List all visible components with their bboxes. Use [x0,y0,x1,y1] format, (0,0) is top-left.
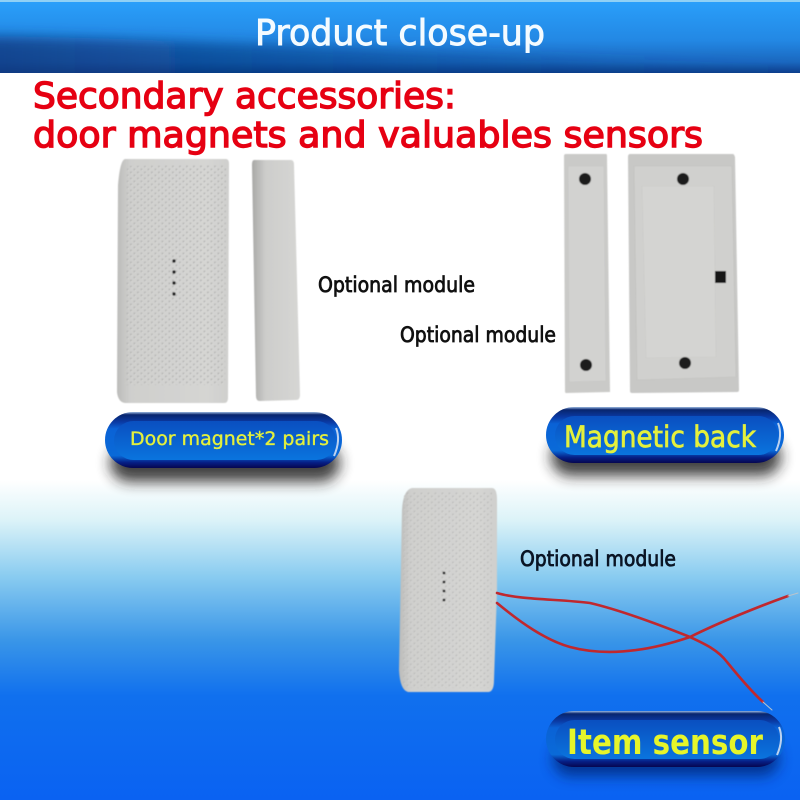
header banner [0,0,800,73]
wires [497,593,798,710]
badge: door magnet [105,412,342,482]
label: optional module sensor: Optional module [520,547,676,571]
indicator dots [172,259,176,296]
product: magnet back large piece [628,154,739,393]
product: door magnet side [252,160,300,401]
badge: item sensor [546,711,785,776]
badge: magnetic back: Magnetic back [564,420,756,454]
product: item sensor [399,488,497,692]
title: Product close-up [255,13,545,54]
product: magnet back small piece [564,154,610,393]
indicator dots [443,572,445,601]
badge: item sensor: Item sensor [567,723,764,763]
heading: secondary accessories: Secondary accessories: [33,76,456,117]
product: door magnet front [117,159,229,403]
switch window [715,271,726,283]
label: optional module front: Optional module [318,273,475,297]
heading: secondary accessories: door magnets and valuables sensors [33,115,703,156]
badge: door magnet: Door magnet*2 pairs [130,428,329,450]
heading: secondary accessories [33,76,703,156]
badge: magnetic back [546,407,784,476]
label: optional module back: Optional module [400,323,556,347]
